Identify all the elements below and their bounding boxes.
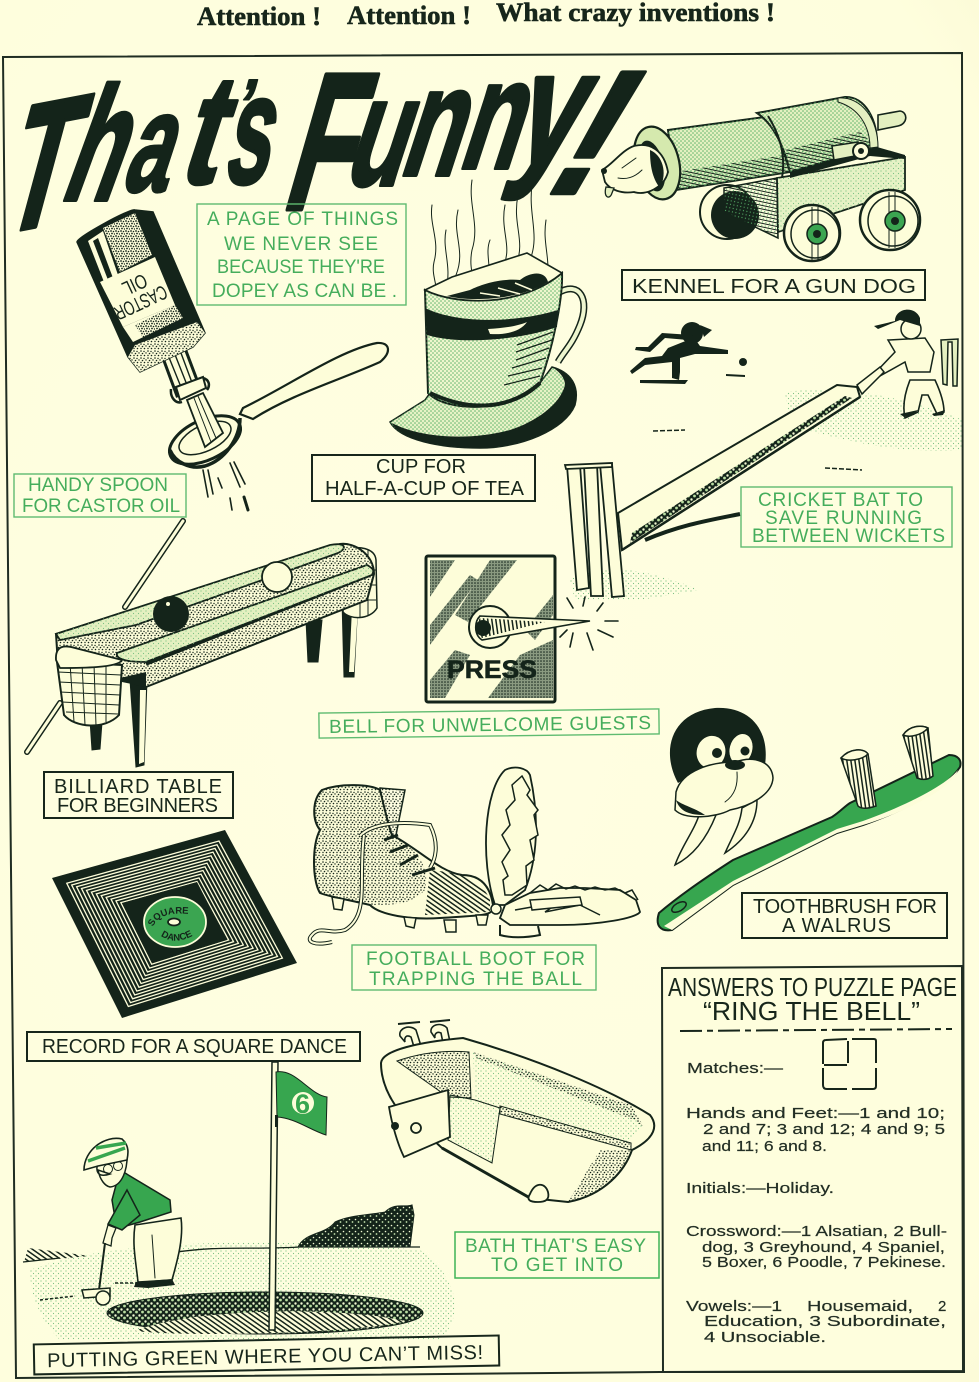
record label text: [148, 907, 192, 941]
icon: batsman: [874, 310, 945, 418]
label: billiard: FOR BEGINNERS: [57, 795, 218, 817]
icon: cue: [27, 521, 183, 752]
bottle label text: CASTOR: [110, 280, 170, 324]
label: billiard: BILLIARD TABLE: [54, 776, 222, 798]
icon: tusks: [675, 812, 716, 865]
icon: flag and pole: [269, 1062, 327, 1330]
icon: table body: [56, 544, 374, 687]
hands and feet answer: 2 and 7; 3 and 12; 4 and 9; 5: [703, 1121, 945, 1138]
callout: intro: BECAUSE THEY'RE: [217, 257, 385, 278]
icon: carriage: [724, 178, 778, 238]
icon: wicket: [565, 463, 624, 597]
label: cricket bat: SAVE RUNNING: [765, 508, 922, 529]
vowels answer: Housemaid,: [807, 1298, 913, 1315]
horizon: [23, 1247, 420, 1262]
title: u: [330, 46, 444, 219]
icon: button: [469, 606, 590, 648]
icon: muzzle: [675, 759, 773, 817]
record label text: DANCE: [161, 930, 192, 941]
icon: studs: [332, 897, 488, 932]
title: t: [165, 44, 258, 216]
icon: panel: [426, 556, 555, 702]
icon: sparks: [560, 597, 618, 650]
icon: laces: [360, 823, 436, 868]
header line: Attention !: [347, 1, 471, 30]
icon: wicket behind batsman: [941, 339, 958, 386]
icon: steam: [431, 180, 548, 300]
icon: disc square: [52, 830, 297, 1018]
title: a: [110, 66, 206, 222]
illustration: walrus toothbrush: [658, 726, 961, 930]
green stipple ground: [785, 390, 963, 451]
illustration: castor oil bottle and spoon: [77, 210, 388, 510]
callout: intro: WE NEVER SEE: [224, 234, 378, 255]
hands and feet answer: and 11; 6 and 8.: [702, 1138, 827, 1155]
label: cricket bat: CRICKET BAT TO: [758, 490, 923, 511]
icon: grass marks: [653, 430, 862, 470]
label: record: RECORD FOR A SQUARE DANCE: [42, 1036, 347, 1058]
icon: tea: [425, 253, 562, 301]
icon: hair: [670, 708, 766, 783]
answers heading: “RING THE BELL”: [703, 996, 920, 1026]
icon: tub: [381, 1038, 654, 1202]
label: spoon: [14, 474, 186, 517]
vowels answer: 2: [938, 1298, 946, 1315]
record label text: SQUARE: [148, 907, 188, 926]
matches answer: Matches:—: [687, 1060, 783, 1077]
icon: bottle: [77, 210, 223, 447]
illustration: bath: [381, 1020, 654, 1202]
label: spoon: HANDY SPOON: [28, 475, 168, 496]
illustration: square record: [52, 830, 297, 1018]
icon: back tongue: [380, 788, 405, 840]
title: ’: [228, 66, 265, 144]
callout: intro: [197, 204, 406, 305]
initials answer: Initials:—Holiday.: [686, 1180, 834, 1197]
crossword answer: [686, 1223, 947, 1271]
title: !: [515, 35, 682, 230]
icon: drops: [203, 462, 248, 510]
crossword answer: dog, 3 Greyhound, 4 Spaniel,: [702, 1239, 945, 1256]
illustration: press bell: [426, 556, 618, 702]
title: n: [445, 29, 559, 202]
label: toothbrush: TOOTHBRUSH FOR: [753, 896, 937, 918]
hands and feet answer: Hands and Feet:—1 and 10;: [686, 1105, 945, 1122]
icon: saucer: [390, 367, 576, 448]
title: [0, 17, 682, 273]
label: bath: BATH THAT'S EASY: [465, 1236, 646, 1257]
label: cricket bat: [741, 487, 952, 547]
icon: left net basket: [56, 646, 122, 726]
icon: barrel: [878, 111, 906, 130]
icon: match squares: [823, 1039, 876, 1089]
icon: bush: [298, 1205, 414, 1247]
icon: golfer: [40, 1138, 182, 1305]
title: s: [215, 42, 296, 216]
PRESS lettering: PRESS: [447, 656, 537, 684]
label: football boot: [352, 945, 596, 990]
vowels answer: [686, 1298, 946, 1346]
bottle label text: [110, 269, 170, 324]
label: football boot: TRAPPING THE BALL: [369, 969, 582, 990]
title: h: [45, 55, 166, 235]
vowels answer: 4 Unsociable.: [704, 1329, 826, 1346]
label: kennel: [622, 270, 925, 300]
illustration: football boot trap: [310, 768, 640, 944]
illustration: cup of tea: [390, 180, 584, 448]
header line: Attention !: [197, 2, 321, 31]
panel: puzzle answers: [662, 966, 963, 1372]
icon: right net basket: [343, 548, 377, 618]
illustration: cannon kennel: [601, 97, 920, 261]
label: kennel: KENNEL FOR A GUN DOG: [632, 276, 916, 298]
title: n: [386, 36, 500, 209]
icon: label disc: [144, 897, 206, 947]
icon: trunnion: [832, 142, 860, 160]
icon: rear wheel: [700, 185, 754, 239]
illustration: cricket: [565, 310, 963, 600]
icon: white ball: [262, 562, 292, 592]
icon: lower jaw: [500, 888, 640, 925]
icon: giant bat: [618, 367, 884, 550]
icon: cup body: [425, 273, 562, 407]
icon: dog in barrel: [601, 122, 687, 204]
answers heading: [668, 972, 957, 1026]
label: cup: HALF-A-CUP OF TEA: [325, 478, 525, 500]
illustration: walrus: [670, 708, 773, 865]
label: toothbrush: [742, 893, 947, 938]
callout: intro: DOPEY AS CAN BE .: [212, 281, 397, 302]
icon: spoon front rim: [170, 418, 240, 467]
label: bath: TO GET INTO: [491, 1255, 623, 1276]
icon: spoon: [162, 343, 388, 474]
callout: intro: A PAGE OF THINGS: [207, 209, 398, 230]
label: bell: BELL FOR UNWELCOME GUESTS: [329, 713, 651, 738]
icon: eyes: [692, 730, 757, 772]
illustration: billiard table: [27, 521, 377, 767]
label: billiard: [44, 772, 233, 818]
label: spoon: FOR CASTOR OIL: [22, 496, 180, 517]
icon: upper jaw: [486, 768, 536, 905]
icon: rails: [56, 544, 344, 640]
icon: taps: [398, 1020, 450, 1047]
label: football boot: FOOTBALL BOOT FOR: [366, 949, 585, 970]
green stipple ground: [30, 1243, 455, 1340]
icon: bristle tufts: [841, 750, 876, 808]
matches answer: [687, 1039, 876, 1089]
title: F: [268, 34, 394, 251]
label: cricket bat: BETWEEN WICKETS: [752, 526, 945, 547]
icon: running shadow figure: [630, 322, 747, 384]
icon: handle: [558, 289, 584, 362]
icon: flag and pole: 6: [295, 1089, 310, 1119]
crossword answer: 5 Boxer, 6 Poodle, 7 Pekinese.: [702, 1254, 946, 1271]
label: cup: [312, 455, 535, 501]
crossword answer: Crossword:—1 Alsatian, 2 Bull-: [686, 1223, 947, 1240]
icon: foot: [528, 1185, 548, 1202]
icon: door: [389, 1090, 450, 1157]
bottle label text: OIL: [118, 269, 150, 299]
label: cup: CUP FOR: [376, 456, 466, 478]
label: bath: [455, 1232, 659, 1278]
icon: black ball: [153, 596, 189, 632]
title: y: [495, 17, 619, 201]
label: toothbrush: A WALRUS: [782, 915, 891, 937]
icon: boot: [314, 785, 493, 918]
illustration: putting green: [23, 1062, 455, 1340]
vowels answer: Education, 3 Subordinate,: [704, 1313, 946, 1330]
icon: front wheels: [784, 190, 920, 261]
hands and feet answer: [686, 1105, 945, 1155]
vowels answer: Vowels:—1: [686, 1298, 782, 1315]
header line: [197, 0, 775, 31]
icon: legs: [90, 600, 358, 767]
icon: hole: [107, 1292, 423, 1334]
label: putting green: PUTTING GREEN WHERE YOU CAN’T MISS!: [47, 1342, 483, 1372]
